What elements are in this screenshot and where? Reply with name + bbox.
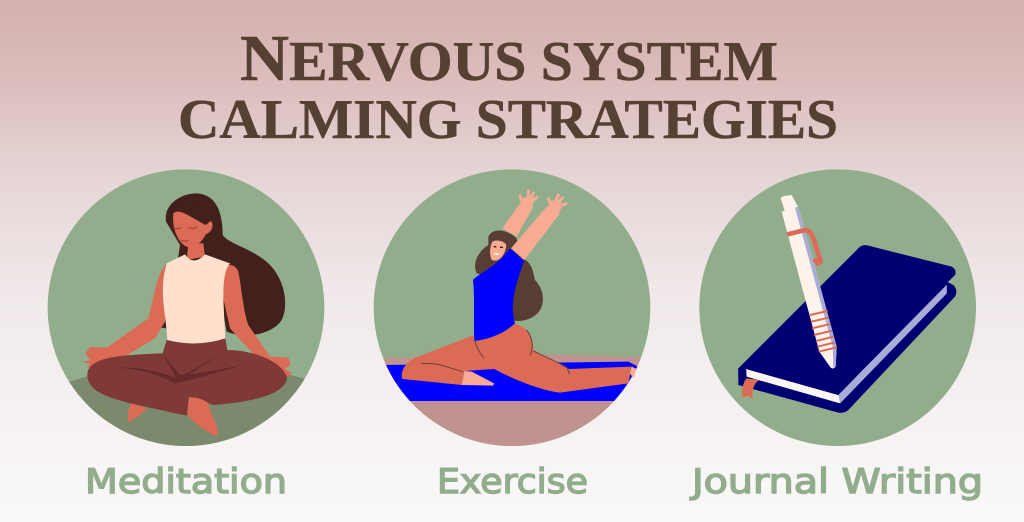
blue shirt [473, 248, 524, 341]
foot [462, 367, 637, 386]
trouser folds [115, 354, 243, 383]
pen [781, 195, 837, 368]
circle background [374, 169, 650, 446]
arms and hands [502, 191, 566, 260]
pen body [782, 207, 837, 368]
pen grip stripes [810, 311, 837, 352]
trouser seams [421, 330, 570, 374]
pen shadow [795, 207, 837, 368]
label: journal writing: Journal Writing [690, 462, 983, 502]
circle background [699, 169, 976, 446]
notebook pages [746, 285, 947, 403]
feet [128, 397, 218, 436]
yoga mat [378, 362, 642, 401]
long hair [161, 193, 285, 335]
smile [493, 253, 500, 255]
title [178, 22, 838, 151]
pen button [781, 195, 798, 212]
panel: journal writing [699, 169, 976, 446]
hand mudra left [83, 347, 112, 368]
notebook front cover [738, 245, 956, 395]
eyes and smile [494, 245, 503, 249]
hair back [475, 230, 543, 321]
title: NERVOUS SYSTEM [240, 22, 778, 95]
face [173, 210, 213, 247]
palms [521, 197, 563, 213]
face [490, 240, 506, 261]
fringe [168, 198, 208, 225]
ground [69, 374, 304, 446]
label: meditation: Meditation [85, 462, 287, 502]
eyes and mouth [173, 227, 197, 241]
pen clip [787, 230, 821, 264]
panel: meditation [48, 169, 324, 465]
floor [383, 354, 642, 446]
pages edge [838, 285, 947, 403]
hand mudra right [263, 357, 292, 379]
trousers [402, 323, 632, 393]
ribbon bookmark [742, 378, 759, 399]
arms [502, 203, 560, 260]
notebook back cover [738, 282, 956, 413]
title: CALMING STRATEGIES [178, 89, 838, 151]
circle background [48, 169, 324, 446]
arms and neck [90, 243, 282, 375]
fingers [520, 191, 566, 206]
panel: exercise [374, 169, 650, 446]
sleeveless top [163, 254, 230, 343]
label: exercise: Exercise [437, 462, 588, 502]
crossed-leg trousers [87, 338, 287, 416]
